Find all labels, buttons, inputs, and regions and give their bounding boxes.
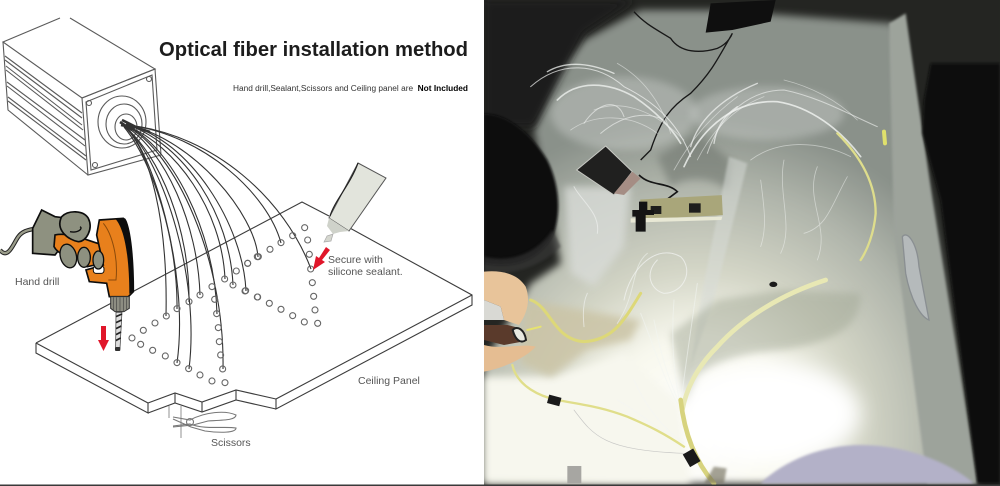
label: secure with sealant: Secure with — [328, 254, 383, 266]
bundle clips — [547, 282, 777, 467]
worker hair fringe — [484, 230, 561, 273]
warm shade — [521, 300, 641, 377]
controller wire — [639, 175, 677, 202]
drill holes — [129, 254, 260, 386]
worker head — [484, 114, 558, 265]
title: Optical fiber installation method — [159, 39, 468, 61]
fiber haze — [551, 77, 697, 150]
left dark upper — [486, 2, 619, 130]
bright floor left — [484, 353, 691, 483]
light controller box — [577, 146, 641, 195]
car ceiling panel — [484, 10, 977, 483]
right side rail — [889, 13, 977, 483]
label: hand drill: Hand drill — [15, 276, 59, 288]
ceiling panel — [36, 202, 472, 438]
optical fibers — [120, 120, 311, 369]
label: scissors: Scissors — [211, 437, 251, 449]
panel: installation photo — [484, 0, 1000, 486]
upper shade — [657, 133, 731, 190]
fiber haze right — [691, 87, 844, 140]
icon: scissors — [173, 412, 236, 432]
bottom small block — [567, 466, 581, 483]
side panel slot — [902, 235, 929, 320]
icon: hand drill — [0, 210, 133, 351]
photo background — [484, 0, 1000, 486]
bracket shadow — [704, 467, 727, 483]
right dark edge — [922, 63, 1000, 483]
bright floor — [681, 363, 861, 463]
icon: sealant tube — [324, 163, 386, 242]
driver board — [631, 195, 723, 232]
lower panel shadow — [671, 290, 861, 407]
bottom lilac shade — [761, 445, 974, 483]
label: silicone sealant: silicone sealant. — [328, 266, 403, 278]
power cable — [634, 12, 732, 160]
arrow: apply sealant — [313, 247, 330, 270]
top control box — [706, 0, 776, 33]
strip shade — [708, 156, 748, 272]
lit panel left — [564, 187, 631, 287]
worker hands — [484, 271, 536, 372]
light source box — [3, 18, 161, 175]
panel: installation diagram — [0, 18, 472, 449]
label: ceiling panel: Ceiling Panel — [358, 375, 420, 387]
arrow: drill down — [98, 326, 109, 351]
not included note: Hand drill,Sealant,Scissors and Ceiling panel are Not Included — [233, 84, 468, 93]
yellow fiber bundles — [512, 132, 885, 483]
white fibers — [531, 63, 877, 453]
bottom edge line — [0, 484, 1000, 486]
